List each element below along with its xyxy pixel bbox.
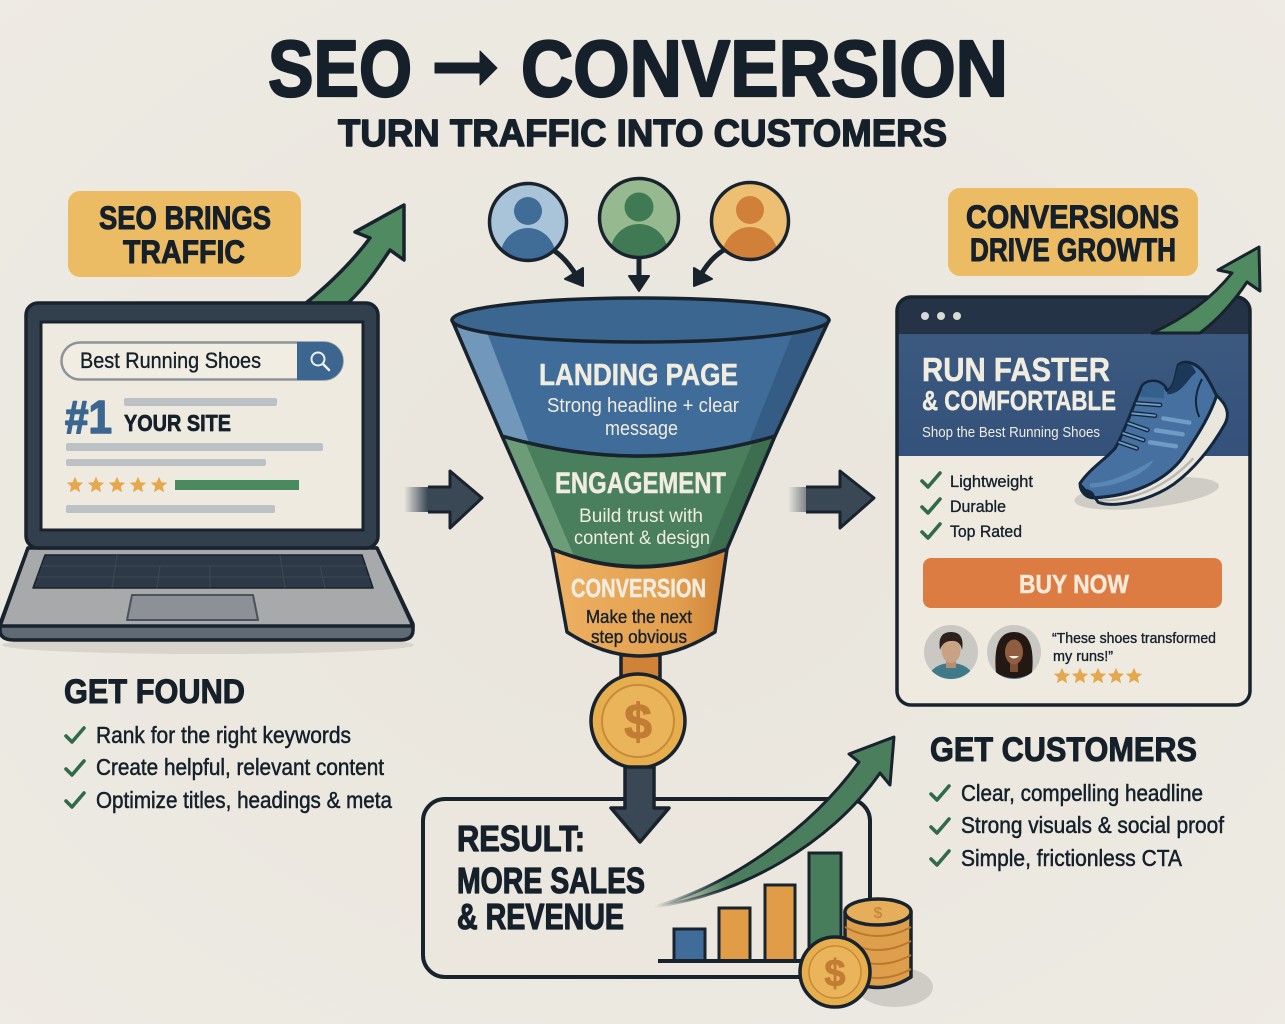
funnel stage: landing page: Strong headline + clear	[547, 395, 739, 417]
search result: #1	[65, 391, 112, 443]
hero copy: & COMFORTABLE	[922, 385, 1116, 416]
button: buy now: BUY NOW	[1019, 569, 1129, 599]
funnel stage: landing page: message	[605, 418, 678, 440]
badge: conversions drive growth	[948, 188, 1198, 276]
panel: conversions drive growth	[897, 188, 1260, 871]
icon: running shoe	[1073, 362, 1227, 515]
funnel stage: conversion: Make the next	[586, 607, 692, 627]
result heading: MORE SALES	[457, 860, 645, 901]
icon: dollar coin: $	[624, 694, 652, 750]
icon: green visitor	[600, 178, 678, 291]
badge: SEO brings traffic: SEO BRINGS	[99, 200, 271, 236]
arrow: conversion growth	[1152, 247, 1260, 333]
result heading: & REVENUE	[457, 896, 624, 937]
text block: get customers: Clear, compelling headline	[961, 780, 1203, 806]
testimonial	[924, 625, 1216, 684]
text block: get found: GET FOUND	[64, 673, 245, 711]
badge: SEO brings traffic: TRAFFIC	[123, 234, 245, 270]
testimonial: “These shoes transformed	[1052, 630, 1216, 647]
funnel spout	[621, 655, 660, 683]
search bar: Best Running Shoes	[80, 348, 261, 373]
icon: coin stacks: $	[824, 953, 846, 995]
funnel stage: conversion: step obvious	[591, 627, 687, 647]
funnel stage: engagement: Build trust with	[579, 506, 703, 527]
text block: get found: Rank for the right keywords	[96, 722, 351, 748]
arrow: traffic growth	[306, 205, 404, 303]
bar chart	[658, 853, 841, 961]
icon: coin stacks: $	[874, 905, 883, 922]
arrow: revenue growth	[654, 737, 894, 907]
title	[268, 24, 1008, 113]
feature list	[922, 472, 1033, 541]
funnel stage: engagement: content & design	[574, 528, 710, 549]
search bar	[62, 342, 343, 380]
subtitle: TURN TRAFFIC INTO CUSTOMERS	[338, 113, 947, 155]
feature list: Lightweight	[950, 472, 1033, 491]
badge: conversions drive growth: CONVERSIONS	[966, 199, 1179, 235]
hero copy: RUN FASTER	[922, 351, 1110, 388]
button: buy now	[923, 558, 1222, 608]
search result: YOUR SITE	[124, 410, 231, 436]
panel: result	[423, 737, 933, 1007]
icon: blue visitor	[490, 184, 583, 288]
text block: get customers: GET CUSTOMERS	[930, 731, 1197, 769]
hero copy	[922, 351, 1116, 441]
result box	[423, 799, 870, 977]
text block: get customers	[930, 731, 1225, 871]
search result	[65, 391, 323, 513]
funnel stage: landing page: LANDING PAGE	[539, 357, 738, 392]
funnel stage: engagement	[502, 436, 775, 566]
arrow: coin to result	[611, 767, 669, 842]
icon: orange visitor	[694, 182, 788, 287]
text block: get found	[64, 673, 392, 813]
title: CONVERSION	[521, 24, 1008, 113]
landing page mockup	[897, 297, 1250, 705]
text block: get customers: Strong visuals & social proof	[961, 812, 1225, 838]
icon: laptop	[0, 303, 414, 654]
icon: dollar coin	[591, 674, 685, 768]
text block: get found: Create helpful, relevant content	[96, 754, 385, 780]
funnel stage: landing page	[452, 298, 829, 456]
badge: conversions drive growth: DRIVE GROWTH	[970, 232, 1176, 268]
feature list: Durable	[950, 497, 1006, 516]
result heading: RESULT:	[457, 818, 585, 859]
panel: visitors	[490, 178, 788, 291]
arrow: laptop to funnel	[404, 471, 482, 528]
icon: coin stacks	[800, 899, 933, 1007]
funnel stage: conversion	[552, 549, 727, 656]
funnel stage: conversion: CONVERSION	[571, 573, 706, 603]
testimonial: my runs!”	[1053, 648, 1113, 665]
panel: SEO brings traffic	[0, 191, 414, 813]
badge: SEO brings traffic	[68, 191, 301, 277]
panel: funnel	[452, 298, 829, 768]
text block: get customers: Simple, frictionless CTA	[961, 845, 1183, 871]
hero copy: Shop the Best Running Shoes	[922, 424, 1100, 441]
arrow: funnel to landing page	[788, 471, 874, 528]
funnel stage: engagement: ENGAGEMENT	[555, 467, 726, 500]
feature list: Top Rated	[950, 522, 1022, 541]
title: SEO	[268, 24, 412, 113]
result heading	[457, 818, 645, 937]
text block: get found: Optimize titles, headings & meta	[96, 787, 392, 813]
